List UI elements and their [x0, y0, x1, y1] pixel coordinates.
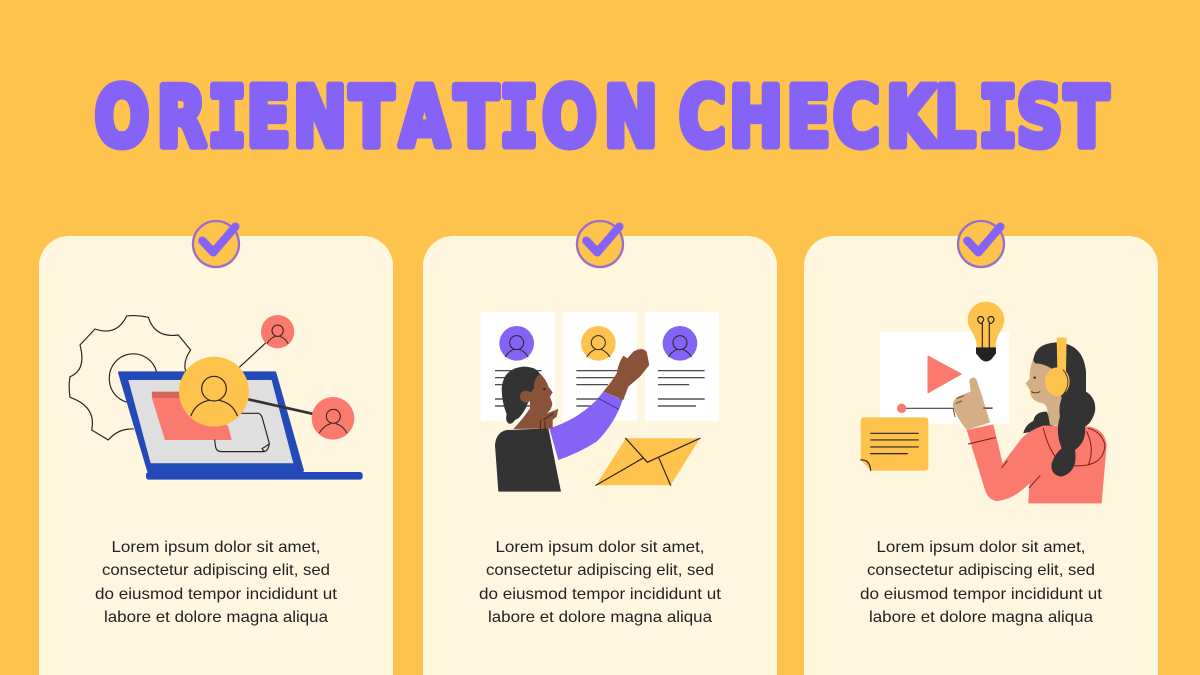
text block 3 [860, 539, 1103, 626]
text block 1: labore et dolore magna aliqua [104, 609, 328, 626]
icon: gear outline [69, 316, 191, 440]
title: R [157, 71, 206, 166]
envelope [596, 438, 700, 485]
title: O [542, 71, 597, 166]
text block 2: Lorem ipsum dolor sit amet, [496, 539, 704, 556]
text block 2: do eiusmod tempor incididunt ut [479, 586, 722, 603]
profile sheet 3 [645, 312, 719, 421]
title: L [935, 71, 975, 166]
avatar: small coral [261, 315, 294, 348]
text block 1: consectetur adipiscing elit, sed [102, 562, 330, 579]
title: E [787, 71, 830, 166]
title: I [979, 71, 1017, 166]
coral folder [152, 392, 232, 440]
card 1 background [39, 236, 393, 675]
icon: check badge 3 [958, 221, 1004, 267]
text block 3: consectetur adipiscing elit, sed [867, 562, 1095, 579]
icon: light bulb [968, 302, 1004, 361]
person reaching [495, 349, 649, 492]
title: T [455, 71, 498, 166]
sticky note [861, 417, 928, 471]
icon: check badge 2 [577, 221, 623, 267]
illustration: laptop with user network [69, 315, 363, 480]
title: C [833, 71, 880, 166]
title: T [350, 71, 393, 166]
person with headphones [953, 338, 1107, 503]
title: S [1016, 71, 1063, 166]
text block 2 [479, 539, 722, 626]
text block 1: Lorem ipsum dolor sit amet, [112, 539, 320, 556]
connector lines [239, 338, 313, 414]
text block 1: do eiusmod tempor incididunt ut [95, 586, 338, 603]
text block 3: Lorem ipsum dolor sit amet, [876, 539, 1086, 556]
title: N [293, 71, 347, 166]
illustration: profiles and envelope [481, 312, 719, 485]
title: K [886, 71, 938, 166]
text block 2: consectetur adipiscing elit, sed [486, 562, 714, 579]
panel: card 3 [804, 221, 1158, 675]
text block 1 [95, 539, 338, 626]
panel: card 2 [423, 221, 777, 675]
document outline [215, 413, 269, 452]
panel: card 1 [39, 221, 393, 675]
profile sheet 1 [481, 312, 555, 421]
avatar: main yellow [179, 357, 249, 427]
title: N [604, 71, 658, 166]
icon: check badge 1 [193, 221, 239, 267]
title: I [208, 71, 246, 166]
title: O [95, 71, 149, 166]
title: C [679, 71, 726, 166]
laptop [119, 373, 363, 480]
video player [880, 332, 1009, 424]
card 2 background [423, 236, 777, 675]
text block 3: do eiusmod tempor incididunt ut [860, 586, 1103, 603]
title: I [500, 71, 538, 166]
text block 3: labore et dolore magna aliqua [869, 609, 1093, 626]
title: H [729, 71, 783, 166]
title: T [1065, 71, 1108, 166]
card 3 background [804, 236, 1158, 675]
illustration: video, bulb and note [861, 302, 1009, 471]
title: A [400, 71, 449, 166]
profile sheet 2 [563, 312, 637, 421]
title: E [247, 71, 290, 166]
text block 2: labore et dolore magna aliqua [488, 609, 712, 626]
avatar: large coral [312, 397, 354, 440]
